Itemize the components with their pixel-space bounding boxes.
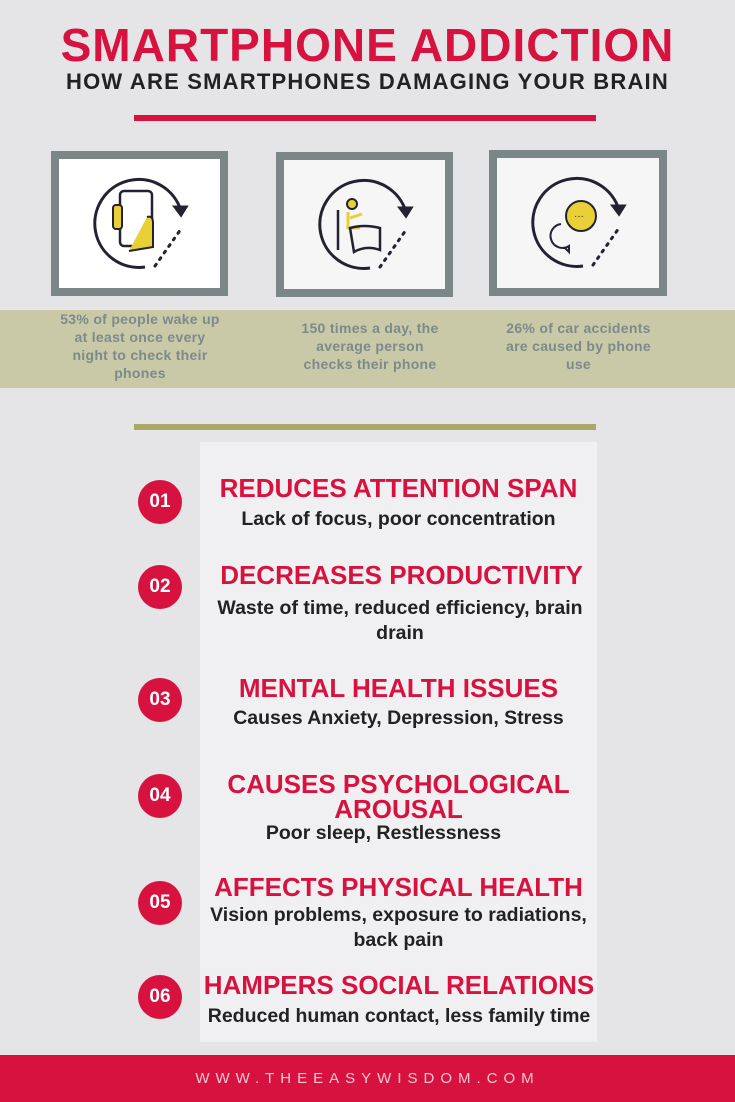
icon box 3: chat bubbles: ···	[574, 211, 584, 222]
item 01	[138, 473, 577, 530]
item 04: CAUSES PSYCHOLOGICAL AROUSAL	[227, 769, 570, 824]
item 02	[138, 560, 583, 644]
stats band	[0, 310, 735, 388]
item 06: HAMPERS SOCIAL RELATIONS	[204, 970, 594, 1000]
stat 2: 150 times a day, the average person checks their phone	[301, 320, 439, 372]
item 05: 05	[149, 892, 171, 913]
icon box 2: person in bed	[276, 152, 453, 297]
item 06: 06	[149, 986, 171, 1007]
item 05: AFFECTS PHYSICAL HEALTH	[214, 872, 583, 902]
item 01: Lack of focus, poor concentration	[241, 508, 556, 530]
item 06: Reduced human contact, less family time	[208, 1005, 590, 1027]
item 02: Waste of time, reduced efficiency, brain drain	[217, 597, 583, 644]
icon box 1: phone in hand	[51, 151, 228, 296]
item 04: 04	[149, 785, 171, 806]
item 02: DECREASES PRODUCTIVITY	[220, 560, 583, 590]
stat 1: 53% of people wake up at least once every night to check their phones	[60, 311, 220, 381]
title: SMARTPHONE ADDICTION	[61, 19, 674, 71]
item 03: Causes Anxiety, Depression, Stress	[233, 707, 564, 729]
item 01: REDUCES ATTENTION SPAN	[220, 473, 577, 503]
item 05: Vision problems, exposure to radiations, back pain	[210, 904, 587, 951]
item 03	[138, 673, 564, 729]
item 05	[138, 872, 587, 951]
item 04: Poor sleep, Restlessness	[266, 822, 501, 844]
item 03: 03	[149, 689, 171, 710]
item 01: 01	[149, 491, 171, 512]
item 03: MENTAL HEALTH ISSUES	[239, 673, 558, 703]
stat 3: 26% of car accidents are caused by phone use	[506, 320, 651, 372]
icon box 3: chat bubbles	[489, 150, 667, 296]
item 04	[138, 769, 570, 844]
list panel	[200, 442, 597, 1042]
item 02: 02	[149, 576, 171, 597]
subtitle: HOW ARE SMARTPHONES DAMAGING YOUR BRAIN	[66, 69, 669, 94]
footer	[0, 1055, 735, 1102]
footer: WWW.THEEASYWISDOM.COM	[195, 1070, 540, 1087]
item 06	[138, 970, 594, 1027]
